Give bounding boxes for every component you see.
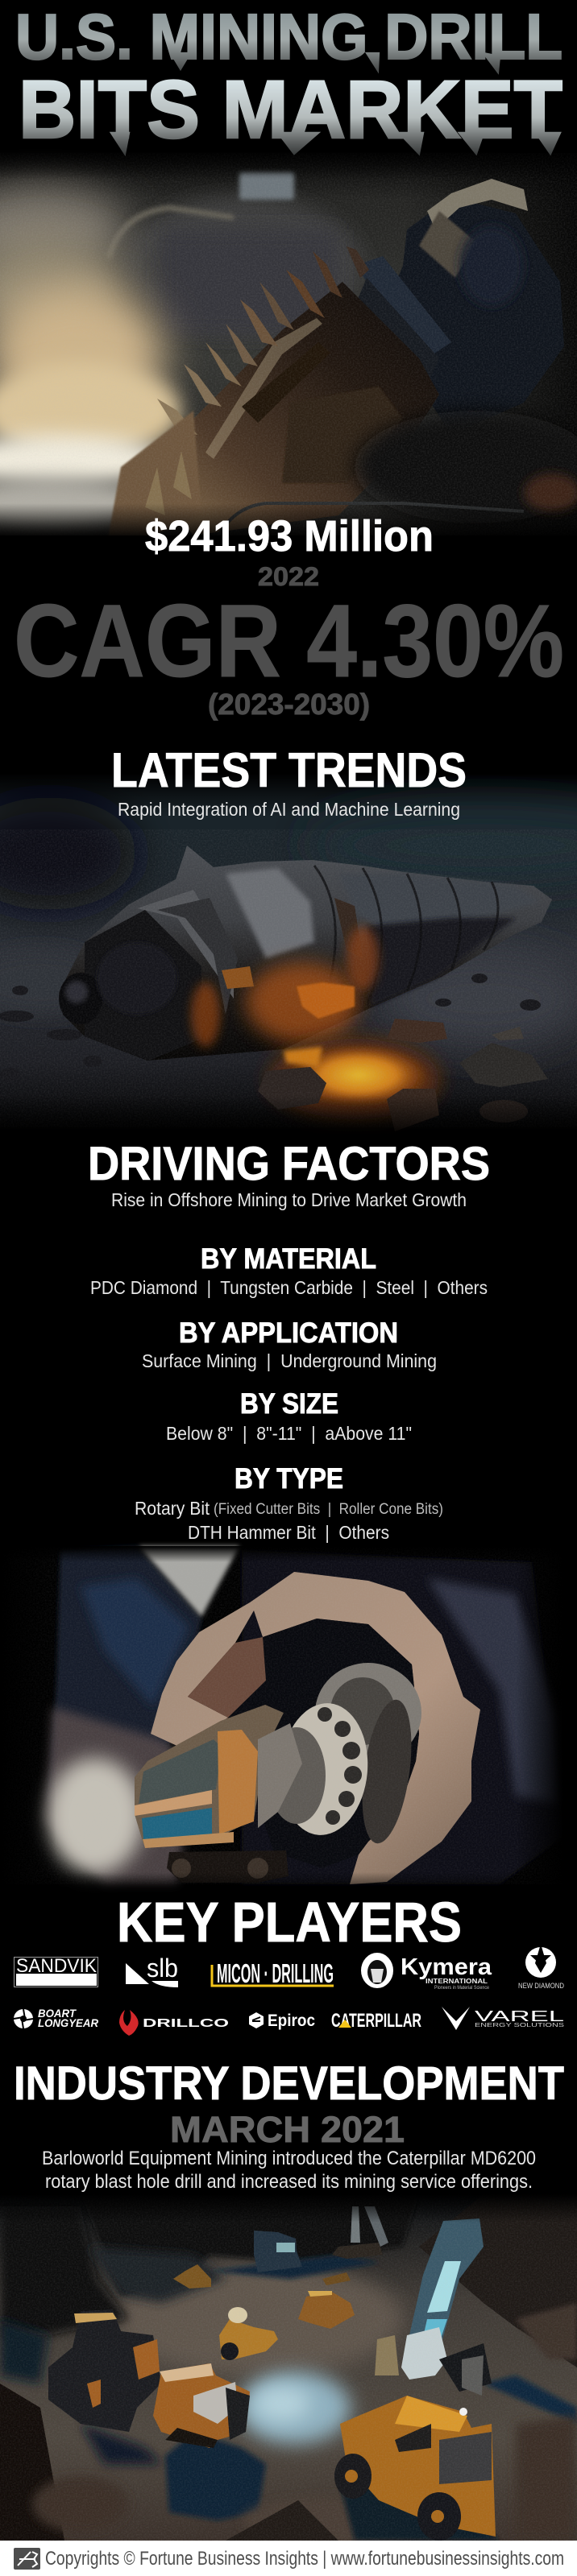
footer bar <box>0 2541 577 2576</box>
drill bit body <box>59 846 552 1061</box>
orange glow on drill <box>246 962 359 1043</box>
segment: by size: BY SIZE <box>240 1388 338 1420</box>
panel: tunnel boring machine photo <box>0 1546 577 1900</box>
title line 2: BITS MARKET <box>19 64 562 155</box>
logo: Caterpillar <box>331 2010 421 2032</box>
segment: by material: PDC Diamond | Tungsten Carbide | Steel | Others <box>90 1277 488 1298</box>
structure: container in background <box>254 2206 388 2272</box>
development description: Barloworld Equipment Mining introduced the Caterpillar MD6200 <box>42 2148 536 2169</box>
logo: Boart Longyear: BOART <box>38 2007 77 2020</box>
icon: Fortune Business Insights logo <box>14 2548 40 2570</box>
floor and water <box>32 2255 500 2545</box>
heading: latest trends: LATEST TRENDS <box>111 743 467 797</box>
segment: by size: Below 8" | 8"-11" | aAbove 11" <box>166 1423 412 1444</box>
base year: 2022 <box>258 562 319 591</box>
logo: Boart Longyear: LONGYEAR <box>38 2016 99 2029</box>
logo: SLB <box>126 1954 178 1987</box>
logo: Drillco <box>119 2010 230 2036</box>
segment: by size <box>166 1388 412 1444</box>
logo: Kymera: Kymera <box>401 1954 492 1980</box>
forecast period: (2023-2030) <box>208 688 370 721</box>
heading: key players: KEY PLAYERS <box>117 1891 462 1954</box>
machine body <box>135 1705 302 1883</box>
panel: mine site photo <box>0 2194 577 2545</box>
fire on the ground <box>258 1019 447 1131</box>
title <box>15 1 562 155</box>
segment: by application <box>142 1317 437 1371</box>
logo: Epiroc: Epiroc <box>268 2012 315 2030</box>
trend description: Rapid Integration of AI and Machine Learning <box>118 799 460 820</box>
segment: by type: Rotary Bit <box>135 1498 210 1519</box>
development description: rotary blast hole drill and increased its mining service offerings. <box>45 2171 533 2193</box>
heading: driving factors: DRIVING FACTORS <box>88 1138 490 1190</box>
panel: hero drill photo <box>0 143 577 564</box>
segment: by material <box>90 1243 488 1298</box>
logo: Sandvik <box>15 1955 98 1987</box>
segment: by type <box>135 1463 443 1543</box>
segment: by type: BY TYPE <box>235 1463 343 1495</box>
segment: by material: BY MATERIAL <box>201 1243 376 1275</box>
segment: by application: BY APPLICATION <box>179 1317 398 1349</box>
logo: Sandvik: SANDVIK <box>16 1955 97 1977</box>
development date: MARCH 2021 <box>170 2109 405 2150</box>
panel: glowing drill photo <box>0 773 577 1139</box>
driving factor description: Rise in Offshore Mining to Drive Market Growth <box>111 1189 467 1210</box>
vehicle: orange dump truck <box>334 2396 496 2541</box>
market value: $241.93 Million <box>145 512 434 560</box>
vehicle: small loaders mid <box>173 2264 355 2360</box>
vehicle: blue-white excavator <box>375 2218 492 2396</box>
segment: by type: (Fixed Cutter Bits | Roller Cone Bits) <box>214 1501 443 1518</box>
logo: Kymera: INTERNATIONAL <box>425 1978 488 1985</box>
rock ring <box>151 1572 480 1884</box>
logo: Epiroc <box>249 2012 315 2030</box>
logo: New Diamond <box>518 1944 564 1990</box>
vehicle: large loader left <box>48 2309 161 2432</box>
logo: SLB: slb <box>147 1954 178 1983</box>
company logos <box>14 1944 564 2036</box>
logo: Varel <box>442 2007 564 2030</box>
logo: Kymera <box>361 1953 492 1991</box>
cutter body with teeth <box>105 246 439 556</box>
vehicle: orange loader centre-left <box>153 2363 250 2448</box>
logo: New Diamond: NEW DIAMOND <box>518 1982 564 1990</box>
cutter disc <box>268 1663 421 1846</box>
segment: by type: DTH Hammer Bit | Others <box>188 1522 389 1543</box>
company logos: MICON · DRILLING <box>217 1958 334 1988</box>
logo: Kymera: Pioneers in Material Science <box>434 1986 490 1991</box>
segment: by application: Surface Mining | Underground Mining <box>142 1350 437 1371</box>
logo: Varel: ENERGY SOLUTIONS <box>475 2023 564 2028</box>
scattered rocks <box>0 974 548 1123</box>
drill head housing <box>347 179 564 435</box>
logo: Boart Longyear <box>14 2007 99 2029</box>
development description <box>42 2148 536 2193</box>
logo: Micon Drilling <box>212 1958 334 1988</box>
logo: Varel: VAREL <box>475 2008 564 2024</box>
logo: Caterpillar: CATERPILLAR <box>331 2010 421 2032</box>
logo: Drillco: DRILLCO <box>143 2016 230 2030</box>
